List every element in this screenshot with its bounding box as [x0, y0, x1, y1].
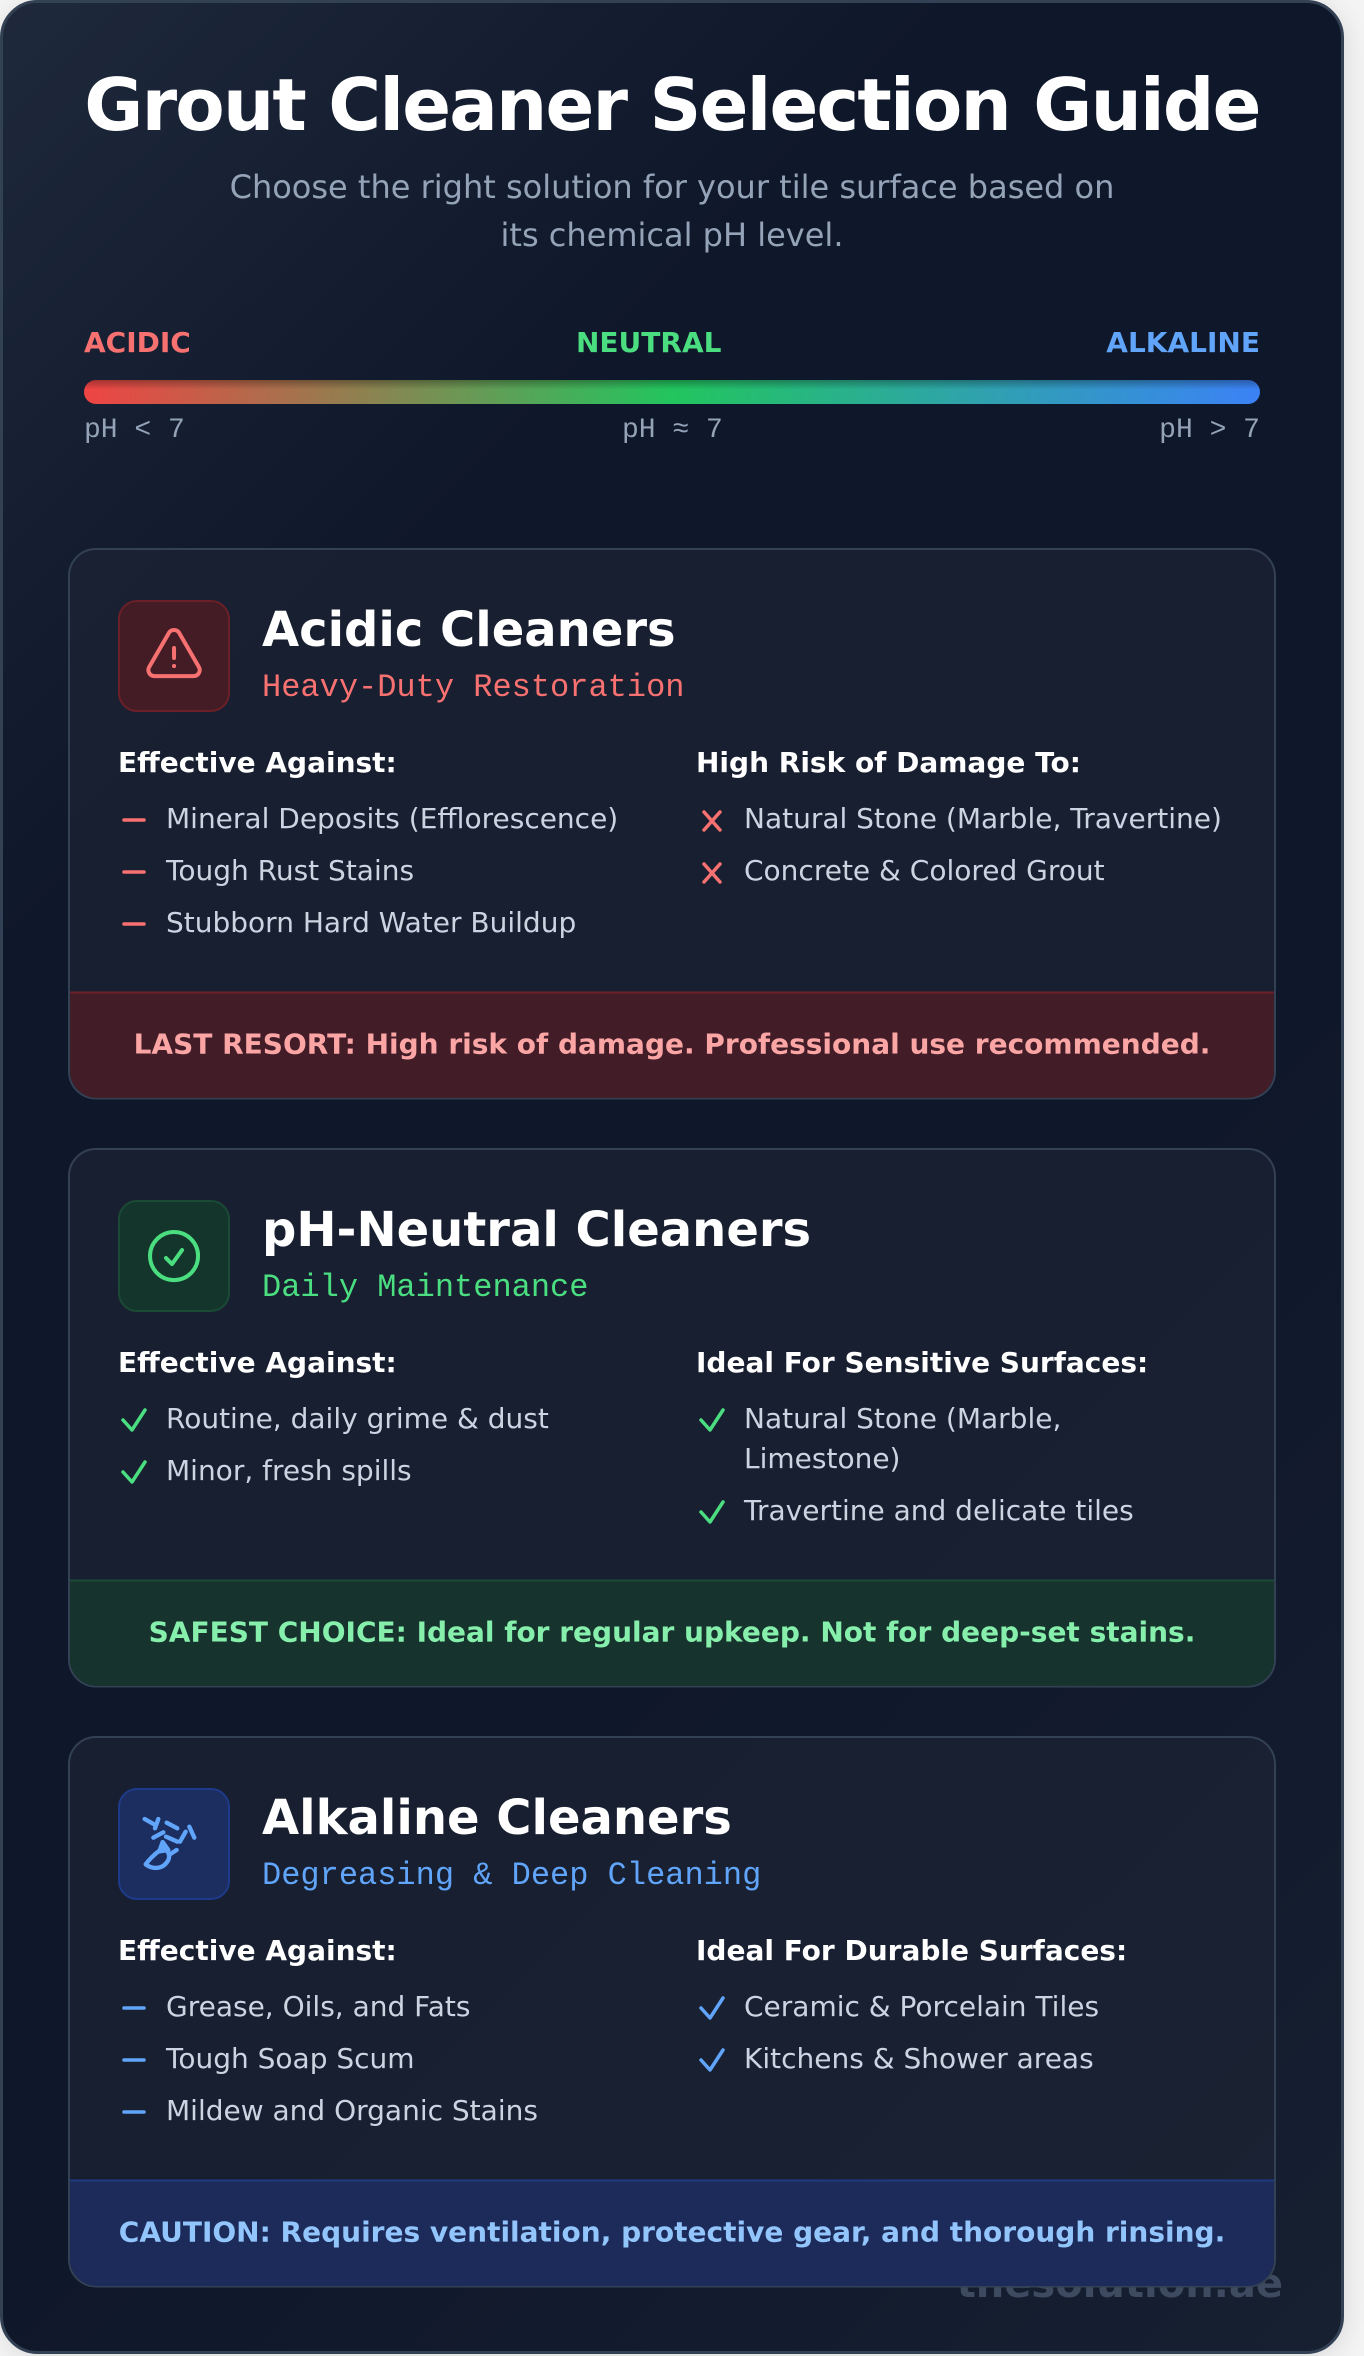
subtitle	[230, 168, 1114, 254]
subtitle: its chemical pH level.	[501, 216, 843, 254]
column: ideal for durable surfaces: Kitchens & Shower areas	[744, 2042, 1094, 2075]
pH values: pH > 7	[1159, 415, 1260, 446]
banner: last resort	[70, 992, 1274, 1098]
watermark: thesolution.ae	[957, 2261, 1283, 2307]
pH values	[84, 415, 1260, 446]
panel: neutral cleaners	[69, 1149, 1275, 1686]
column: ideal for durable surfaces: Ceramic & Porcelain Tiles	[744, 1990, 1099, 2023]
scale labels: ALKALINE	[1106, 326, 1260, 359]
column: ideal for durable surfaces: Ideal For Durable Surfaces:	[696, 1934, 1127, 1967]
banner: last resort: LAST RESORT: High risk of damage. Professional use recommended.	[134, 1028, 1210, 1060]
column: effective against: Minor, fresh spills	[166, 1454, 412, 1487]
column: ideal for sensitive surfaces: Ideal For Sensitive Surfaces:	[696, 1346, 1148, 1379]
scale labels: NEUTRAL	[576, 326, 722, 359]
column: ideal for sensitive surfaces: Limestone)	[744, 1442, 900, 1475]
icon: spray	[119, 1789, 229, 1899]
heading: Acidic Cleaners	[262, 602, 676, 658]
heading: pH-Neutral Cleaners	[262, 1202, 811, 1258]
heading: Alkaline Cleaners	[262, 1790, 732, 1846]
scale labels	[84, 326, 1260, 359]
column: effective against: Grease, Oils, and Fats	[166, 1990, 470, 2023]
column: high risk: High Risk of Damage To:	[696, 746, 1081, 779]
column: effective against: Effective Against:	[118, 746, 397, 779]
column: effective against: Effective Against:	[118, 1934, 397, 1967]
column: effective against	[118, 746, 618, 939]
scale labels: ACIDIC	[84, 326, 191, 359]
column: effective against: Stubborn Hard Water Buildup	[166, 906, 576, 939]
column: effective against	[118, 1346, 549, 1487]
pH values: pH ≈ 7	[622, 415, 723, 446]
subheading: Degreasing & Deep Cleaning	[262, 1857, 761, 1894]
icon: check circle	[119, 1201, 229, 1311]
column: high risk: Concrete & Colored Grout	[744, 854, 1105, 887]
column: effective against: Routine, daily grime & dust	[166, 1402, 549, 1435]
panel: alkaline cleaners	[69, 1737, 1275, 2286]
column: effective against: Effective Against:	[118, 1346, 397, 1379]
subheading: Daily Maintenance	[262, 1269, 588, 1306]
column: effective against: Mildew and Organic Stains	[166, 2094, 538, 2127]
column: effective against: Tough Soap Scum	[165, 2042, 415, 2075]
column: high risk	[696, 746, 1222, 887]
column: ideal for sensitive surfaces: Travertine and delicate tiles	[743, 1494, 1134, 1527]
column: high risk: Natural Stone (Marble, Travertine)	[744, 802, 1222, 835]
column: ideal for sensitive surfaces: Natural Stone (Marble,	[744, 1402, 1061, 1435]
column: effective against: Mineral Deposits (Efflorescence)	[166, 802, 618, 835]
subheading: Heavy-Duty Restoration	[262, 669, 684, 706]
column: effective against	[118, 1934, 538, 2127]
title: Grout Cleaner Selection Guide	[84, 63, 1260, 147]
banner: safest choice	[70, 1580, 1274, 1686]
column: effective against: Tough Rust Stains	[165, 854, 414, 887]
gradient bar	[84, 380, 1260, 404]
panel: acidic cleaners	[69, 549, 1275, 1098]
icon: warning triangle	[119, 601, 229, 711]
pH scale	[84, 326, 1260, 446]
banner: caution	[70, 2180, 1274, 2286]
banner: caution: CAUTION: Requires ventilation, protective gear, and thorough rinsing.	[119, 2216, 1225, 2248]
pH values: pH < 7	[84, 415, 185, 446]
column: ideal for sensitive surfaces	[696, 1346, 1148, 1527]
column: ideal for durable surfaces	[696, 1934, 1127, 2075]
subtitle: Choose the right solution for your tile surface based on	[230, 168, 1114, 206]
banner: safest choice: SAFEST CHOICE: Ideal for regular upkeep. Not for deep-set stains.	[149, 1616, 1195, 1648]
